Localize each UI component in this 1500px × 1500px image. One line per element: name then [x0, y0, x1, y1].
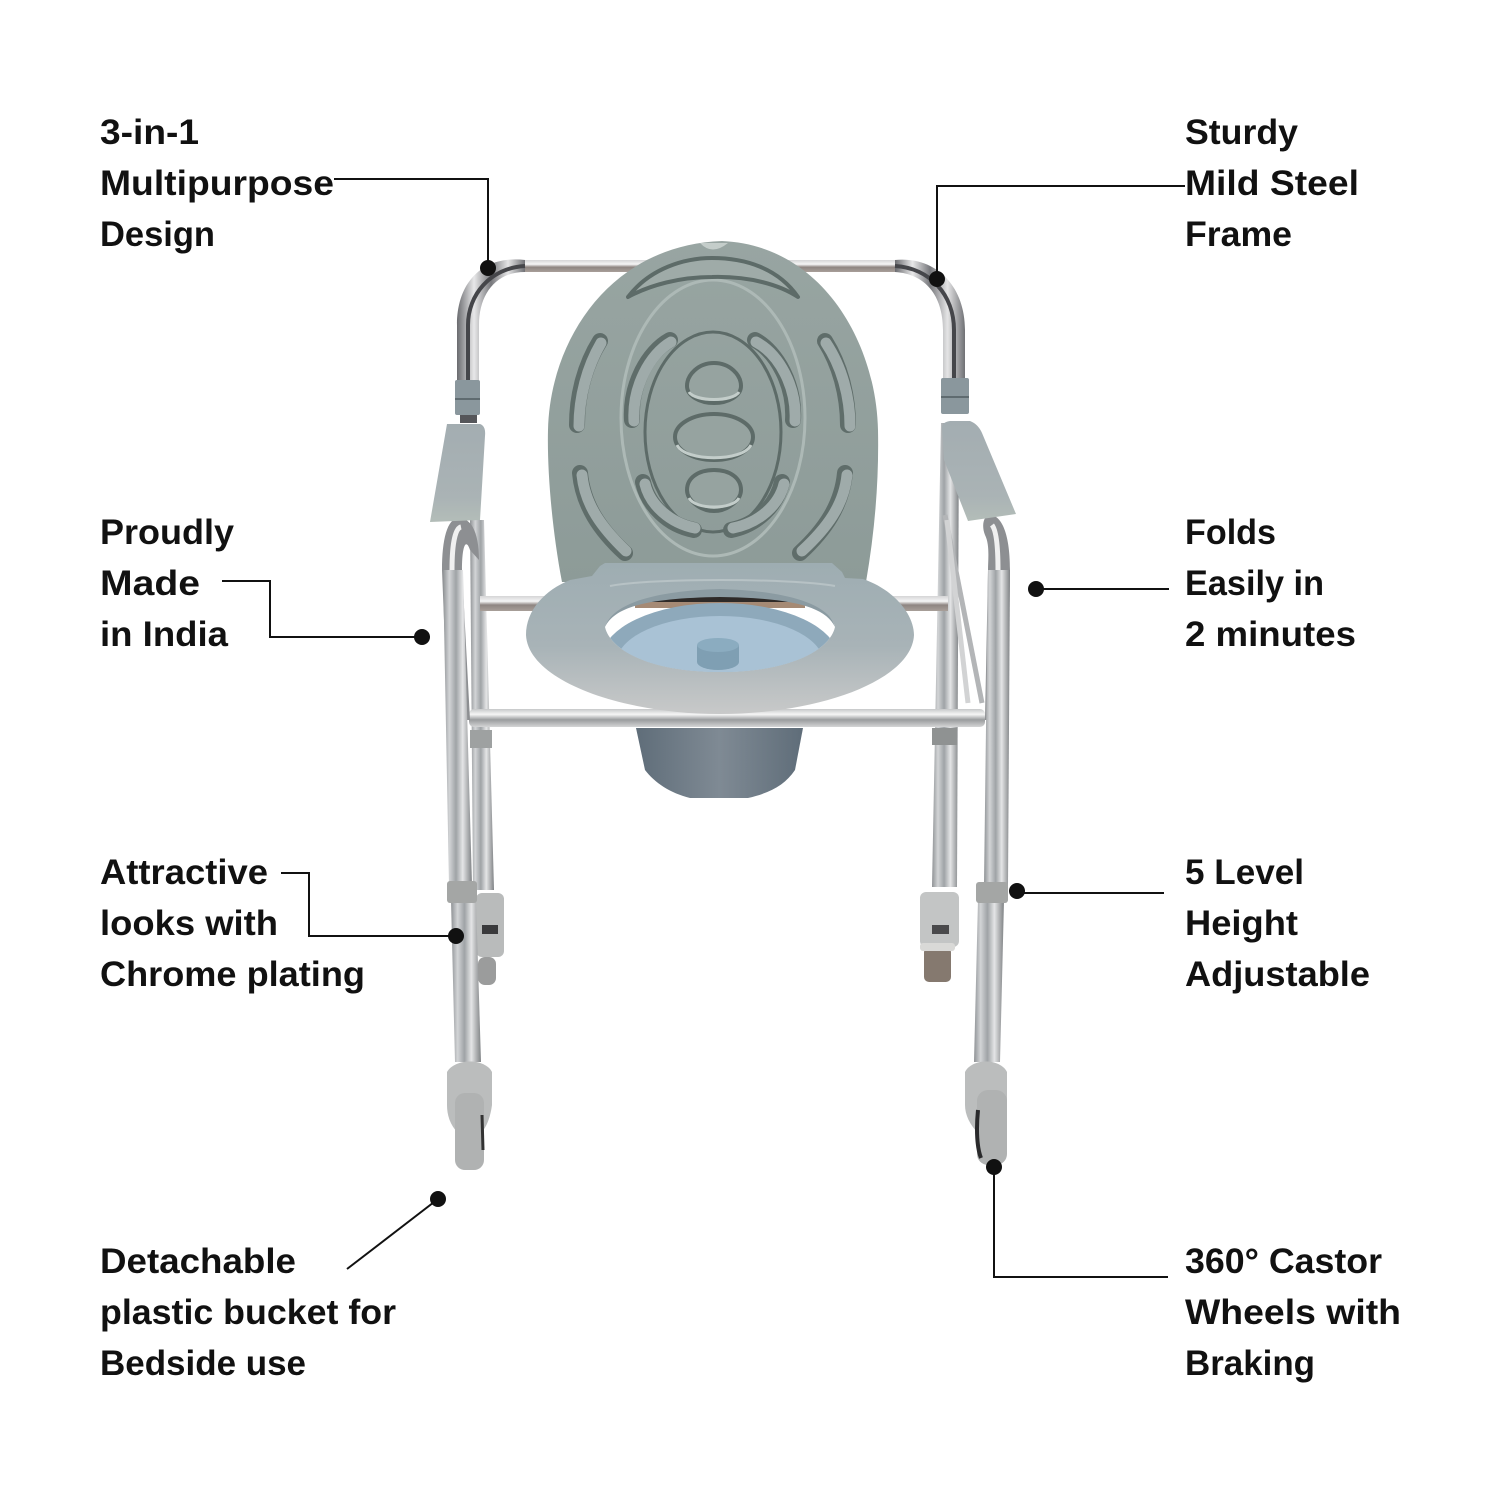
top backrest frame: [457, 259, 965, 382]
callout: 360° Castor Wheels with Braking: Braking: [1185, 1344, 1315, 1383]
callout: 360° Castor Wheels with Braking: 360° Castor: [1185, 1242, 1382, 1281]
seat: [526, 563, 914, 714]
armrests: [430, 421, 1016, 522]
callout: Sturdy Mild Steel Frame: [929, 113, 1359, 287]
callout: Detachable plastic bucket for Bedside use: plastic bucket for: [100, 1293, 396, 1332]
callout: 360° Castor Wheels with Braking: [986, 1159, 1401, 1383]
callout: Proudly Made in India: Proudly: [100, 513, 235, 552]
front castors: [447, 1062, 1007, 1170]
callout: Folds Easily in 2 minutes: 2 minutes: [1185, 615, 1356, 654]
callout: 5 Level Height Adjustable: Height: [1185, 904, 1298, 943]
product photo: commode chair: [430, 241, 1016, 1170]
backrest lid: [548, 241, 878, 582]
callout: Proudly Made in India: [100, 513, 430, 654]
callout: Attractive looks with Chrome plating: [100, 853, 464, 994]
callout: Sturdy Mild Steel Frame: Frame: [1185, 215, 1292, 254]
callout: Detachable plastic bucket for Bedside use: Bedside use: [100, 1344, 306, 1383]
frame collars: [455, 378, 969, 423]
side brace: [945, 515, 982, 703]
rear legs: [470, 423, 959, 890]
callout: Detachable plastic bucket for Bedside use: Detachable: [100, 1242, 296, 1281]
callout: Detachable plastic bucket for Bedside use: [100, 1191, 446, 1383]
height-adjust collars: [447, 881, 1008, 903]
callout: Folds Easily in 2 minutes: Folds: [1185, 513, 1276, 552]
callout: 5 Level Height Adjustable: 5 Level: [1185, 853, 1304, 892]
callout: 360° Castor Wheels with Braking: Wheels with: [1185, 1293, 1401, 1332]
callout: Folds Easily in 2 minutes: Easily in: [1185, 564, 1324, 603]
rear castors: [476, 892, 959, 985]
callout: 3-in-1 Multipurpose Design: Design: [100, 215, 215, 254]
front cross bar: [469, 709, 985, 727]
top crescent slot: [628, 258, 798, 297]
callout: Attractive looks with Chrome plating: Chrome plating: [100, 955, 365, 994]
slots light: [579, 342, 850, 551]
callout: Sturdy Mild Steel Frame: Mild Steel: [1185, 164, 1359, 203]
callout: 5 Level Height Adjustable: Adjustable: [1185, 955, 1370, 994]
callout: 5 Level Height Adjustable: [1009, 853, 1370, 994]
callout: Folds Easily in 2 minutes: [1028, 513, 1356, 654]
front frame and legs: [442, 515, 1010, 1062]
callout: Sturdy Mild Steel Frame: Sturdy: [1185, 113, 1299, 152]
back cross bar: [480, 596, 948, 611]
callout: Attractive looks with Chrome plating: looks with: [100, 904, 278, 943]
callout: 3-in-1 Multipurpose Design: 3-in-1: [100, 113, 199, 152]
callout: 3-in-1 Multipurpose Design: [100, 113, 496, 276]
bucket: [636, 728, 803, 798]
slots dark: [577, 340, 848, 553]
callout: Proudly Made in India: Made: [100, 564, 200, 603]
callout: Attractive looks with Chrome plating: Attractive: [100, 853, 268, 892]
callout: Proudly Made in India: in India: [100, 615, 229, 654]
embossed ovals: [675, 363, 753, 511]
callout: 3-in-1 Multipurpose Design: Multipurpose: [100, 164, 334, 203]
